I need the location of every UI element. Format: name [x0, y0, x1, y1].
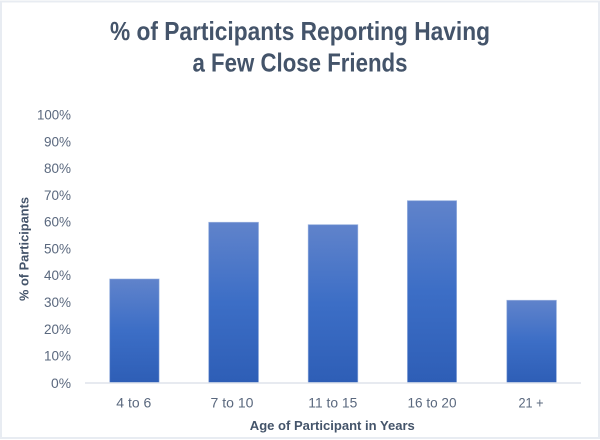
- y axis tick labels: 30%: [44, 294, 71, 310]
- y axis title: % of Participants: [16, 197, 32, 301]
- y axis tick labels: 0%: [51, 375, 71, 391]
- bar: 7 to 10: [209, 222, 258, 383]
- title: % of Participants Reporting Having: [110, 16, 490, 46]
- x axis tick labels: [116, 394, 544, 410]
- bar: 11 to 15: [308, 225, 358, 383]
- title: [110, 16, 490, 78]
- bar: 21 +: [507, 300, 556, 383]
- y axis tick labels: 10%: [44, 348, 71, 364]
- y axis tick labels: 100%: [37, 106, 71, 122]
- bar: 16 to 20: [407, 201, 457, 383]
- y axis tick labels: 20%: [44, 321, 71, 337]
- y axis tick labels: 90%: [44, 133, 71, 149]
- y axis tick labels: 50%: [44, 240, 71, 256]
- y axis tick labels: 60%: [44, 214, 71, 230]
- y axis tick labels: 40%: [44, 267, 71, 283]
- y axis tick labels: [37, 106, 71, 391]
- y axis tick labels: 70%: [44, 187, 71, 203]
- x axis line: [85, 382, 581, 384]
- bar: 4 to 6: [110, 279, 159, 383]
- y axis tick labels: 80%: [44, 160, 71, 176]
- x axis tick labels: 21 +: [518, 394, 544, 410]
- x axis tick labels: 4 to 6: [116, 394, 152, 410]
- bars: [110, 201, 556, 383]
- title: a Few Close Friends: [192, 48, 408, 78]
- x axis tick labels: 7 to 10: [210, 394, 254, 410]
- x axis tick labels: 11 to 15: [308, 394, 358, 410]
- x axis tick labels: 16 to 20: [408, 394, 457, 410]
- x axis title: Age of Participant in Years: [250, 418, 415, 433]
